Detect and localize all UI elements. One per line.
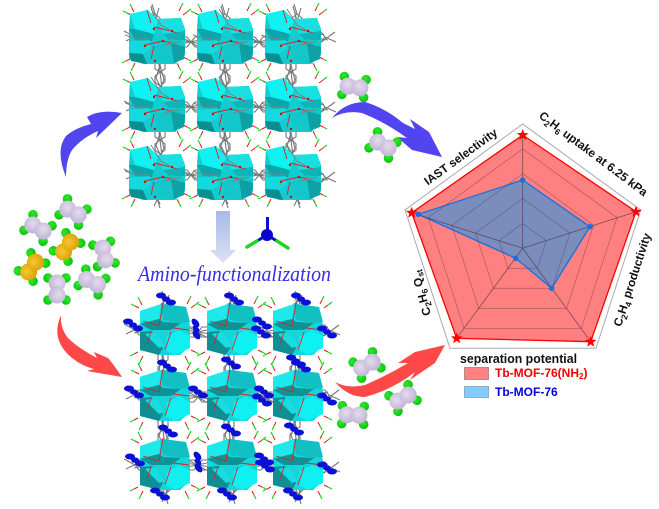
axis label: C2H4 productivity: 2 bbox=[619, 313, 630, 321]
legend label: Tb-MOF-76(NH2): ) bbox=[583, 366, 587, 380]
axis label: C2H6 uptake: uptake at 6.25 kPa bbox=[558, 124, 651, 199]
axis label: separation potential: separation potential bbox=[460, 352, 577, 366]
axis label: C2H6 Qst: Q bbox=[410, 276, 427, 292]
series: Tb-MOF-76 bbox=[418, 180, 590, 288]
legend label: Tb-MOF-76(NH2): Tb-MOF-76(NH bbox=[495, 366, 579, 380]
axis label: C2H4 productivity: H bbox=[615, 303, 631, 316]
legend swatch: red bbox=[464, 368, 488, 380]
axis label: C2H6 Qst: st bbox=[414, 268, 426, 278]
legend bbox=[464, 366, 587, 399]
axis label: C2H4 productivity: C bbox=[611, 316, 626, 328]
blue data points bbox=[416, 177, 593, 291]
axis label: C2H6 Qst: H bbox=[415, 293, 430, 305]
arrow: amino-functionalization down arrow bbox=[210, 211, 236, 263]
star markers bbox=[406, 129, 642, 347]
radar chart bbox=[405, 124, 642, 348]
icon: molecules near top-right arrow bbox=[336, 71, 403, 165]
axis label: C2H6 Qst: 2 bbox=[423, 300, 434, 308]
arrow: bottom-right red curved arrow bbox=[335, 345, 445, 397]
legend label: Tb-MOF-76(NH2): 2 bbox=[579, 372, 584, 381]
panel: Tb-MOF-76 crystal structure bbox=[122, 3, 336, 208]
axis label: C2H6 uptake: 2 bbox=[542, 118, 552, 129]
axis label: C2H4 productivity: productivity bbox=[619, 231, 654, 303]
icon: molecules near bottom-right arrow bbox=[337, 345, 424, 429]
axis label: C2H6 uptake: 6 bbox=[553, 126, 563, 137]
axis label: C2H6 Qst: C bbox=[418, 305, 434, 317]
panel: Tb-MOF-76(NH2) crystal structure bbox=[123, 291, 340, 504]
series: Tb-MOF-76(NH2) bbox=[412, 135, 636, 342]
axis label: C2H6 Qst: 6 bbox=[419, 287, 430, 295]
amino groups on linkers bbox=[123, 292, 337, 500]
heading: Amino-functionalization: Amino-functionalization bbox=[136, 261, 331, 286]
axis label: C2H4 productivity: 4 bbox=[623, 300, 634, 308]
arrow: top-right blue curved arrow bbox=[332, 102, 442, 157]
axis label: IAST selectivity: IAST selectivity bbox=[421, 125, 500, 188]
axis label: C2H6 uptake: H bbox=[547, 116, 562, 133]
arrow: bottom-left red curved arrow bbox=[57, 315, 122, 377]
legend swatch: blue bbox=[464, 386, 488, 398]
axis label: C2H6 uptake: C bbox=[536, 108, 552, 125]
icon: gas mixture molecules bbox=[12, 192, 121, 305]
arrow: top-left blue curved arrow bbox=[60, 112, 122, 177]
legend label: Tb-MOF-76: Tb-MOF-76 bbox=[495, 385, 558, 399]
icon: amino group bbox=[247, 217, 288, 248]
